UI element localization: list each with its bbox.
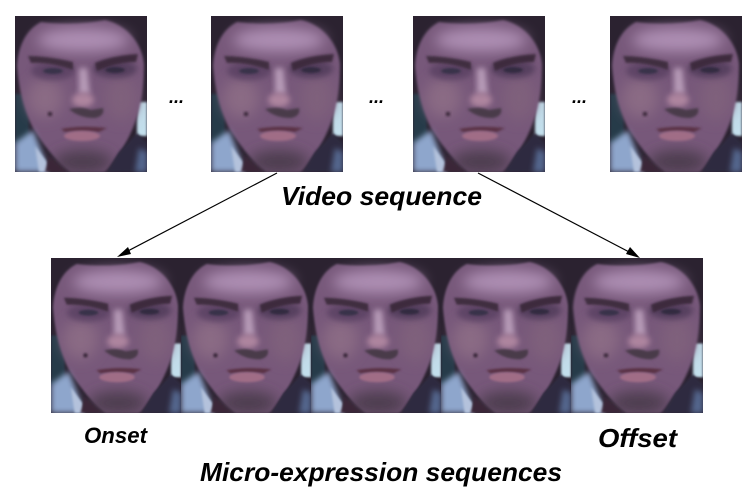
arrow: to onset xyxy=(117,173,277,257)
arrow: to offset xyxy=(478,173,640,258)
label: onset: Onset xyxy=(84,423,149,448)
video frame 3 xyxy=(413,16,545,174)
micro-expression frame 5 xyxy=(571,258,703,415)
micro-expression frame 3 xyxy=(311,258,441,415)
micro-expression frame 1 xyxy=(51,258,181,415)
micro-expression frame 2 xyxy=(181,258,311,415)
heading: micro-expression sequences: Micro-expression sequences xyxy=(200,457,562,487)
micro-expression frame 4 xyxy=(441,258,571,415)
video frame 2 xyxy=(211,16,343,174)
ellipsis 3: ... xyxy=(572,87,587,107)
video frame 1 xyxy=(15,16,147,174)
label: offset: Offset xyxy=(598,423,678,453)
ellipsis 1: ... xyxy=(169,87,184,107)
ellipsis 2: ... xyxy=(369,87,384,107)
video frame 4 xyxy=(610,16,742,174)
heading: video sequence: Video sequence xyxy=(281,181,482,211)
